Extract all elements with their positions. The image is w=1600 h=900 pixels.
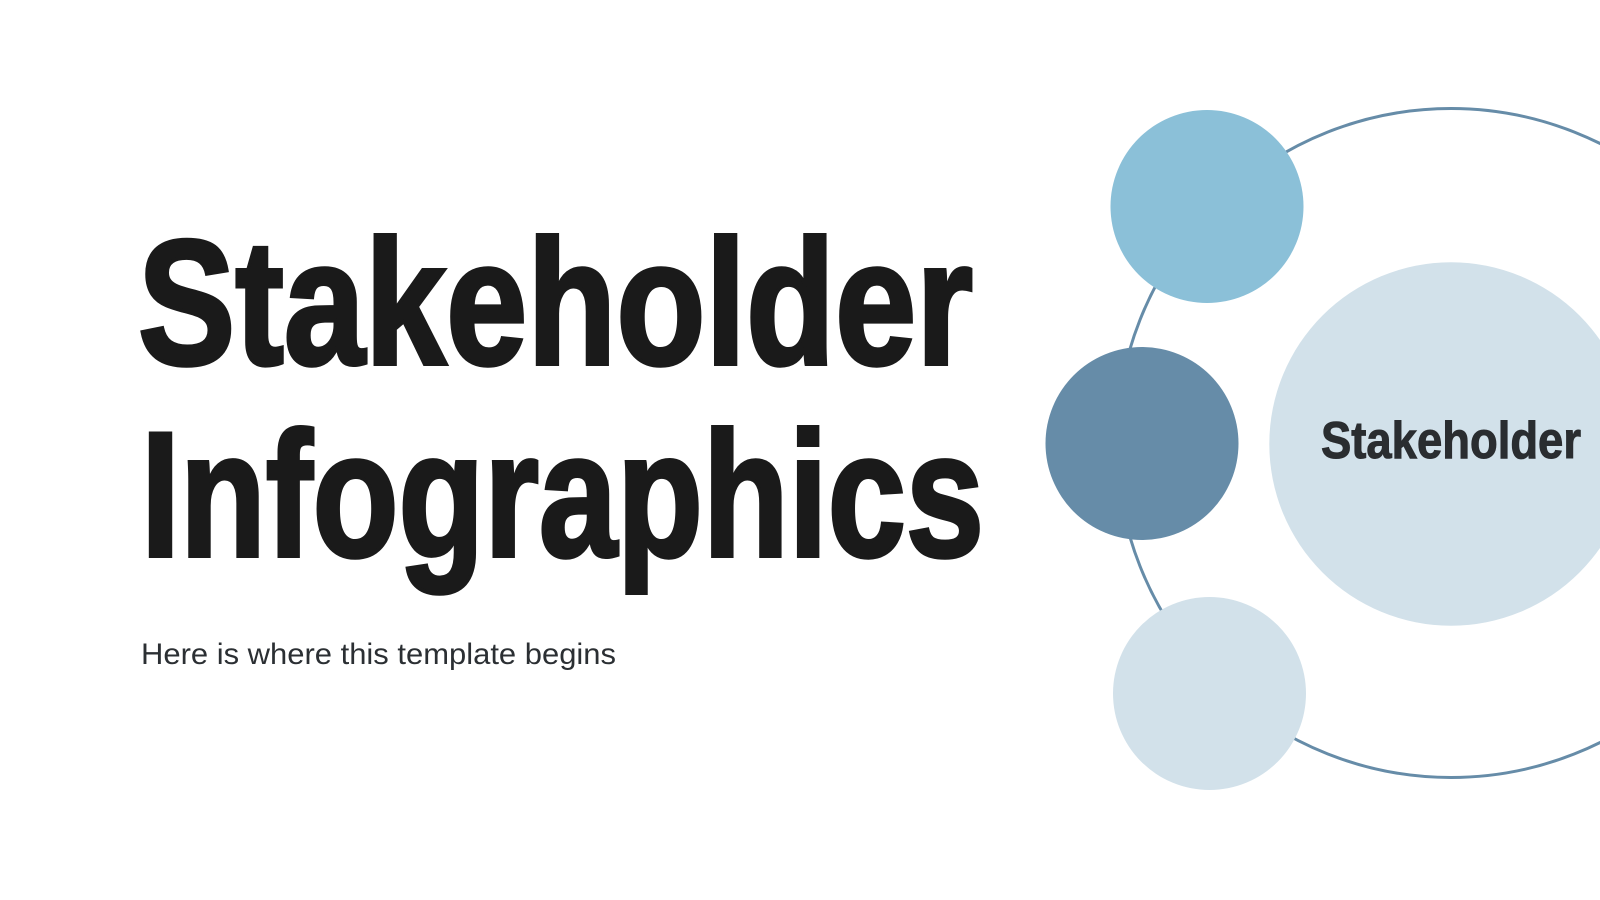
bottom node xyxy=(1113,597,1306,790)
top node xyxy=(1110,110,1304,303)
title: Stakeholder xyxy=(138,203,973,402)
subtitle: Here is where this template begins xyxy=(141,638,616,671)
orbit ring xyxy=(1116,108,1600,778)
title: Infographics xyxy=(141,395,984,594)
middle node xyxy=(1046,347,1238,540)
title xyxy=(138,203,984,594)
stakeholder diagram xyxy=(1046,108,1600,790)
central circle xyxy=(1269,262,1600,626)
